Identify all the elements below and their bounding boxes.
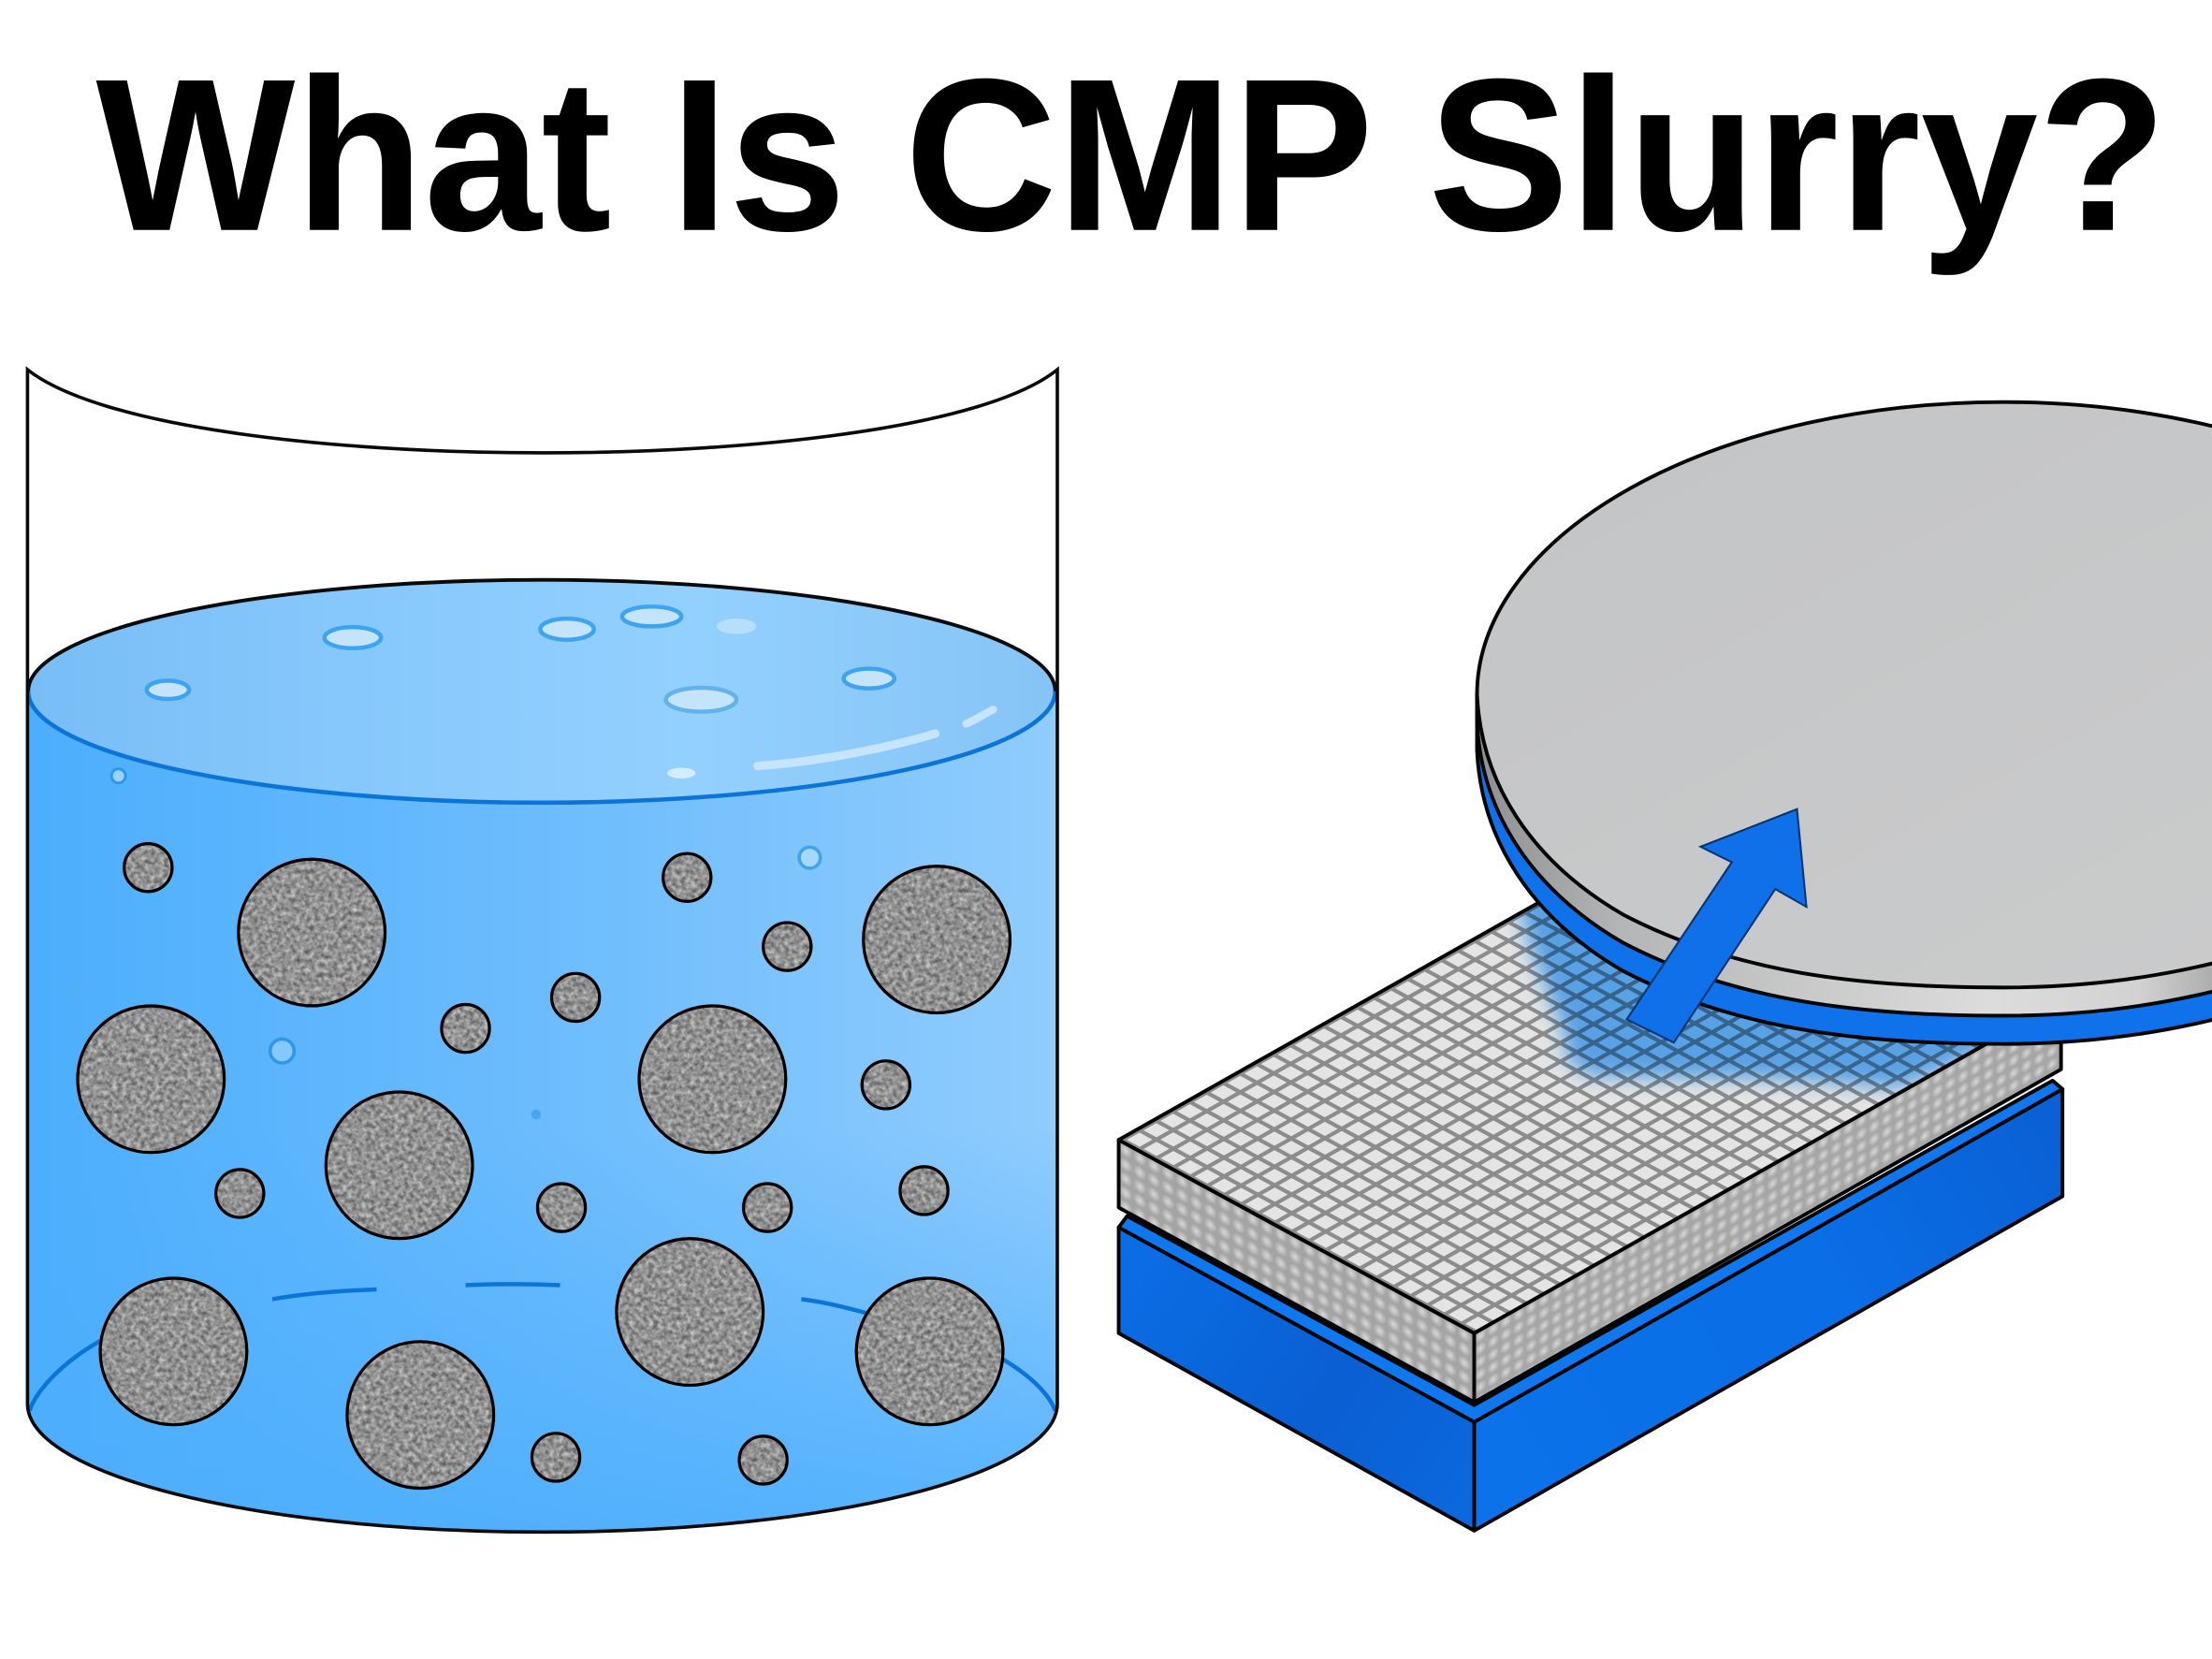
surface bubbles (147, 606, 895, 779)
surface highlights (758, 709, 993, 766)
polishing pad sides (1119, 1001, 2061, 1403)
large abrasive particle (239, 859, 386, 1006)
small abrasive particle (124, 844, 172, 892)
wafer blue layer (1477, 695, 2212, 1044)
title: What Is CMP Slurry? (96, 35, 2167, 277)
blue platen base (1119, 1081, 2062, 1531)
wafer grey edge (1477, 695, 2212, 1016)
liquid surface (28, 580, 1055, 803)
slurry wetting on pad (1508, 905, 1980, 1102)
removal arrow (1626, 809, 1807, 1042)
beaker glass outline (27, 370, 1057, 1532)
slurry liquid body (28, 691, 1056, 1532)
beaker bottom back arc segments (30, 1284, 1055, 1411)
submerged bubbles (65, 769, 821, 1119)
beaker of CMP slurry (27, 370, 1057, 1532)
wafer top surface (1477, 402, 2212, 987)
polishing pad top grid (1119, 808, 2061, 1333)
abrasive particles (78, 844, 1010, 1489)
polishing pad stack (1117, 902, 2064, 1533)
wafer disc (1477, 402, 2212, 1044)
